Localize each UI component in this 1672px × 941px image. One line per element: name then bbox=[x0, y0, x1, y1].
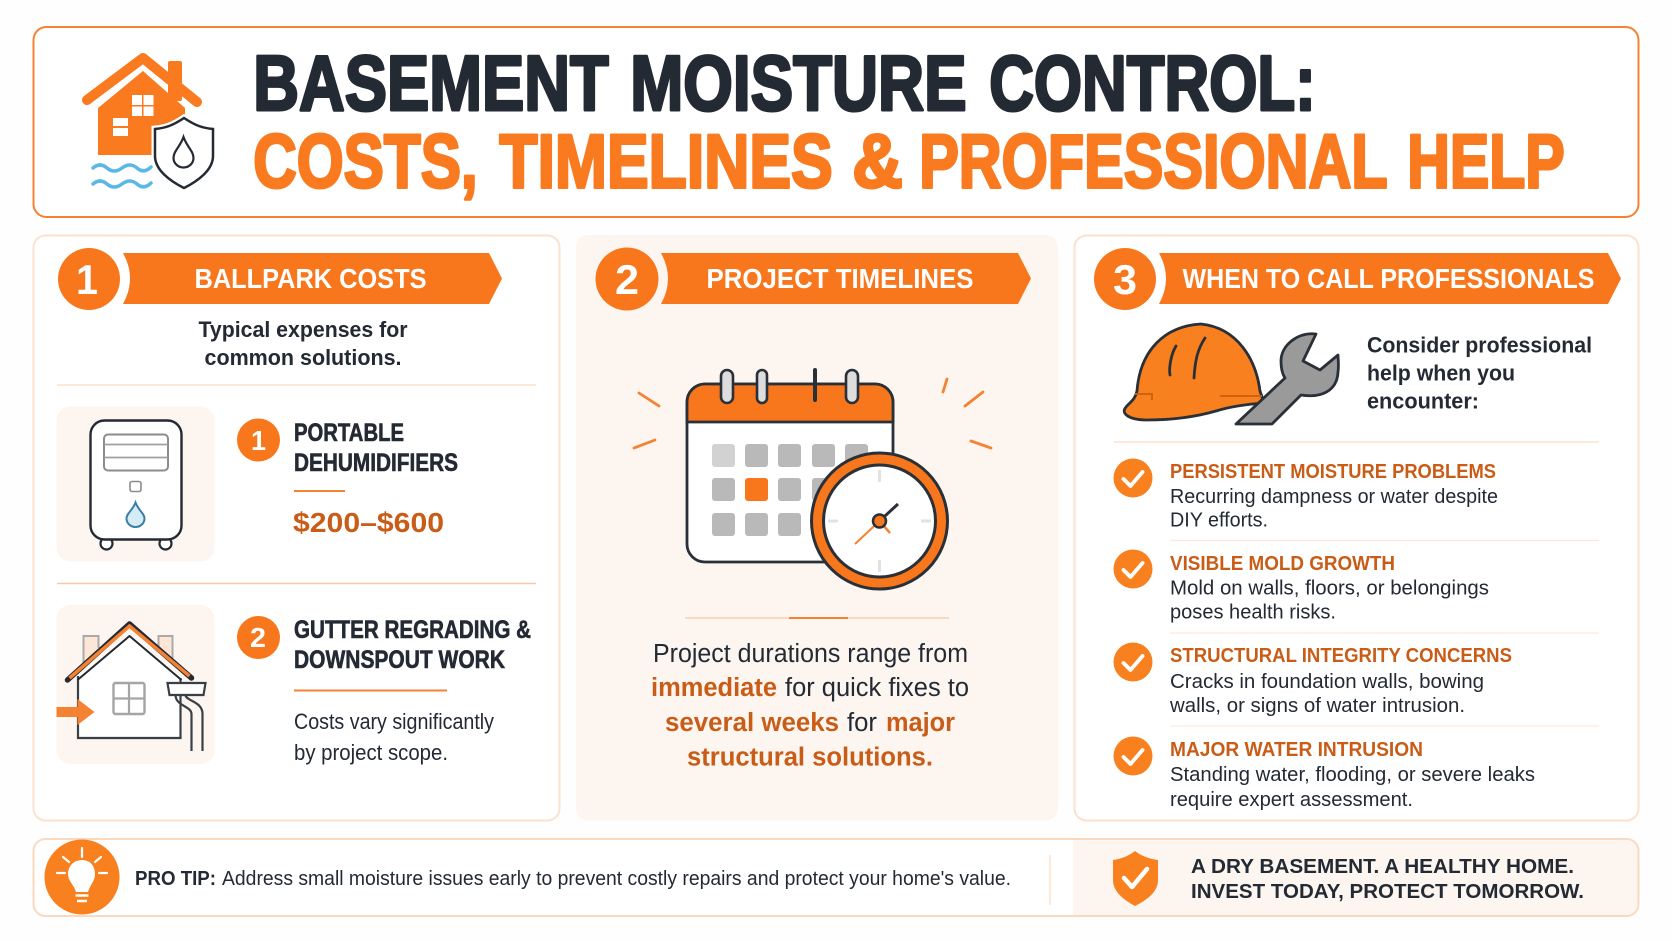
title: PROFESSIONAL bbox=[919, 120, 1388, 204]
section heading: ballpark costs bbox=[58, 248, 502, 310]
section heading: ballpark costs: 1 bbox=[76, 256, 98, 303]
intro text: encounter: bbox=[1367, 388, 1479, 414]
title: COSTS, bbox=[253, 120, 478, 204]
closing slogan: A DRY BASEMENT. A HEALTHY HOME. bbox=[1191, 855, 1574, 878]
panel: ballpark costs bbox=[34, 236, 560, 820]
item: gutter regrading bbox=[237, 616, 531, 765]
item: portable dehumidifiers: PORTABLE bbox=[294, 419, 404, 447]
item: structural integrity concerns: STRUCTURAL INTEGRITY CONCERNS bbox=[1170, 645, 1512, 667]
item: major water intrusion: require expert assessment. bbox=[1170, 789, 1413, 811]
title: HELP bbox=[1407, 120, 1565, 204]
item: persistent moisture problems: PERSISTENT MOISTURE PROBLEMS bbox=[1170, 461, 1496, 483]
item: major water intrusion bbox=[1114, 736, 1535, 811]
timeline description: for bbox=[847, 709, 878, 737]
pro tip text: PRO TIP: bbox=[135, 868, 216, 890]
footer bar bbox=[34, 839, 1638, 916]
intro text: common solutions. bbox=[204, 345, 402, 370]
timeline description: immediate bbox=[651, 674, 777, 702]
title: CONTROL: bbox=[989, 39, 1316, 127]
item: portable dehumidifiers: DEHUMIDIFIERS bbox=[294, 449, 458, 477]
item: major water intrusion: Standing water, flooding, or severe leaks bbox=[1170, 764, 1535, 786]
title: & bbox=[852, 120, 903, 204]
item: gutter regrading: 2 bbox=[250, 622, 266, 653]
title: TIMELINES bbox=[499, 120, 833, 204]
item: portable dehumidifiers: $200–$600 bbox=[293, 507, 444, 538]
icon: calendar and clock bbox=[634, 370, 991, 589]
timeline description: several weeks bbox=[665, 709, 839, 737]
section heading: project timelines: 2 bbox=[615, 256, 639, 303]
item: gutter regrading: Costs vary significantly bbox=[294, 709, 495, 734]
item: visible mold growth: VISIBLE MOLD GROWTH bbox=[1170, 553, 1395, 575]
icon: light bulb bbox=[44, 840, 120, 914]
item: structural integrity concerns: walls, or signs of water intrusion. bbox=[1169, 695, 1465, 717]
item: structural integrity concerns bbox=[1114, 642, 1512, 717]
intro text: Typical expenses for bbox=[198, 317, 408, 342]
title: MOISTURE bbox=[630, 39, 967, 127]
item: visible mold growth: Mold on walls, floors, or belongings bbox=[1170, 578, 1489, 600]
item: gutter regrading: DOWNSPOUT WORK bbox=[294, 646, 505, 674]
header panel bbox=[34, 27, 1638, 217]
icon: house with gutter bbox=[56, 605, 214, 764]
closing slogan bbox=[1191, 855, 1584, 903]
icon: shield with check bbox=[1113, 851, 1158, 906]
timeline description: Project durations range from bbox=[653, 640, 968, 668]
title bbox=[253, 39, 1565, 204]
section heading: ballpark costs: BALLPARK COSTS bbox=[194, 263, 426, 294]
panel: project timelines bbox=[576, 235, 1058, 820]
section heading: when to call professionals: WHEN TO CALL PROFESSIONALS bbox=[1182, 263, 1594, 294]
intro text: help when you bbox=[1367, 360, 1515, 386]
section heading: project timelines bbox=[590, 241, 1031, 317]
timeline description: major bbox=[886, 709, 955, 737]
timeline description bbox=[651, 640, 969, 772]
icon: house with shield and water bbox=[87, 58, 213, 188]
intro text bbox=[1367, 332, 1592, 414]
timeline description: structural solutions. bbox=[687, 744, 933, 772]
title: BASEMENT bbox=[253, 39, 609, 127]
item: major water intrusion: MAJOR WATER INTRUSION bbox=[1170, 739, 1423, 761]
item: persistent moisture problems: Recurring dampness or water despite bbox=[1170, 486, 1498, 508]
item: persistent moisture problems: DIY efforts. bbox=[1170, 510, 1268, 532]
item: portable dehumidifiers: 1 bbox=[251, 425, 266, 456]
item: gutter regrading: by project scope. bbox=[294, 740, 448, 765]
pro tip text: Address small moisture issues early to prevent costly repairs and protect your home's value. bbox=[222, 868, 1011, 890]
item: portable dehumidifiers bbox=[237, 418, 458, 538]
item: gutter regrading: GUTTER REGRADING & bbox=[294, 616, 531, 644]
icon: hard hat and wrench bbox=[1124, 324, 1338, 424]
intro text: Consider professional bbox=[1367, 332, 1592, 358]
item: persistent moisture problems bbox=[1114, 458, 1498, 532]
item: visible mold growth bbox=[1114, 550, 1489, 624]
section heading: when to call professionals: 3 bbox=[1113, 256, 1137, 303]
section heading: project timelines: PROJECT TIMELINES bbox=[706, 263, 974, 294]
icon: dehumidifier bbox=[56, 406, 214, 562]
item: visible mold growth: poses health risks. bbox=[1170, 602, 1336, 624]
intro text bbox=[198, 317, 408, 370]
panel: when to call professionals bbox=[1074, 236, 1638, 820]
item: structural integrity concerns: Cracks in foundation walls, bowing bbox=[1170, 671, 1484, 693]
section heading: when to call professionals bbox=[1094, 248, 1621, 310]
timeline description: for quick fixes to bbox=[785, 674, 969, 702]
closing slogan: INVEST TODAY, PROTECT TOMORROW. bbox=[1191, 880, 1584, 903]
